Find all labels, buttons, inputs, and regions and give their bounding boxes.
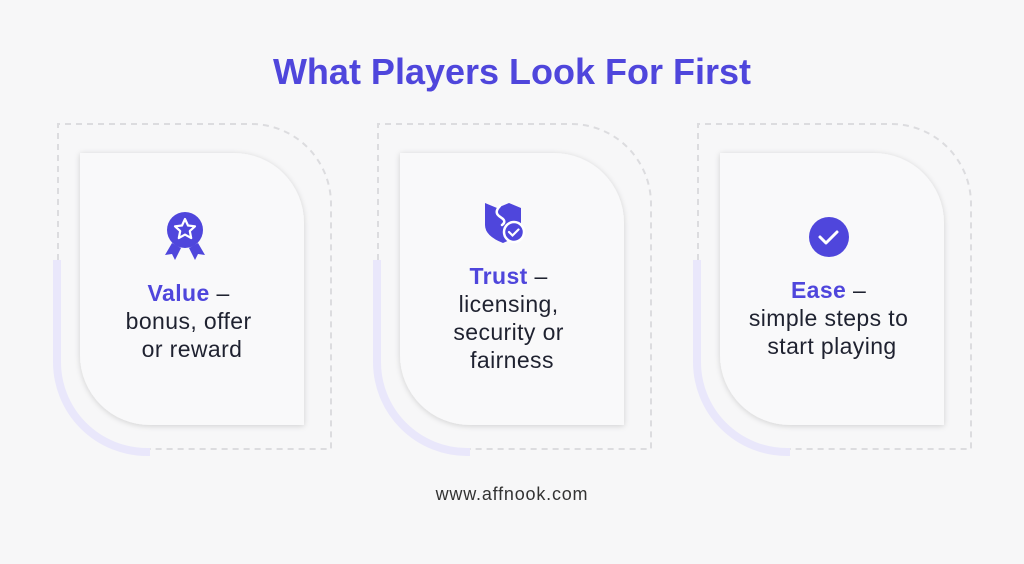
icon: check circle [809, 217, 849, 257]
text: ease: simple steps to [749, 305, 908, 331]
panel: value [57, 124, 331, 452]
icon: medal [165, 212, 205, 260]
text: ease: start playing [767, 333, 897, 359]
text: trust: fairness [470, 347, 554, 373]
text: value: Value – [148, 280, 230, 306]
text: value: bonus, offer [126, 308, 252, 334]
text: trust: Trust – [469, 263, 548, 289]
panel: trust [377, 124, 651, 452]
text: trust: licensing, [459, 291, 559, 317]
panel: ease [697, 124, 971, 452]
footer url: www.affnook.com [435, 484, 588, 504]
text: value: or reward [142, 336, 242, 362]
text: ease: Ease – [791, 277, 866, 303]
text: trust: security or [453, 319, 564, 345]
title: What Players Look For First [273, 51, 751, 92]
icon: shield check [485, 203, 524, 243]
